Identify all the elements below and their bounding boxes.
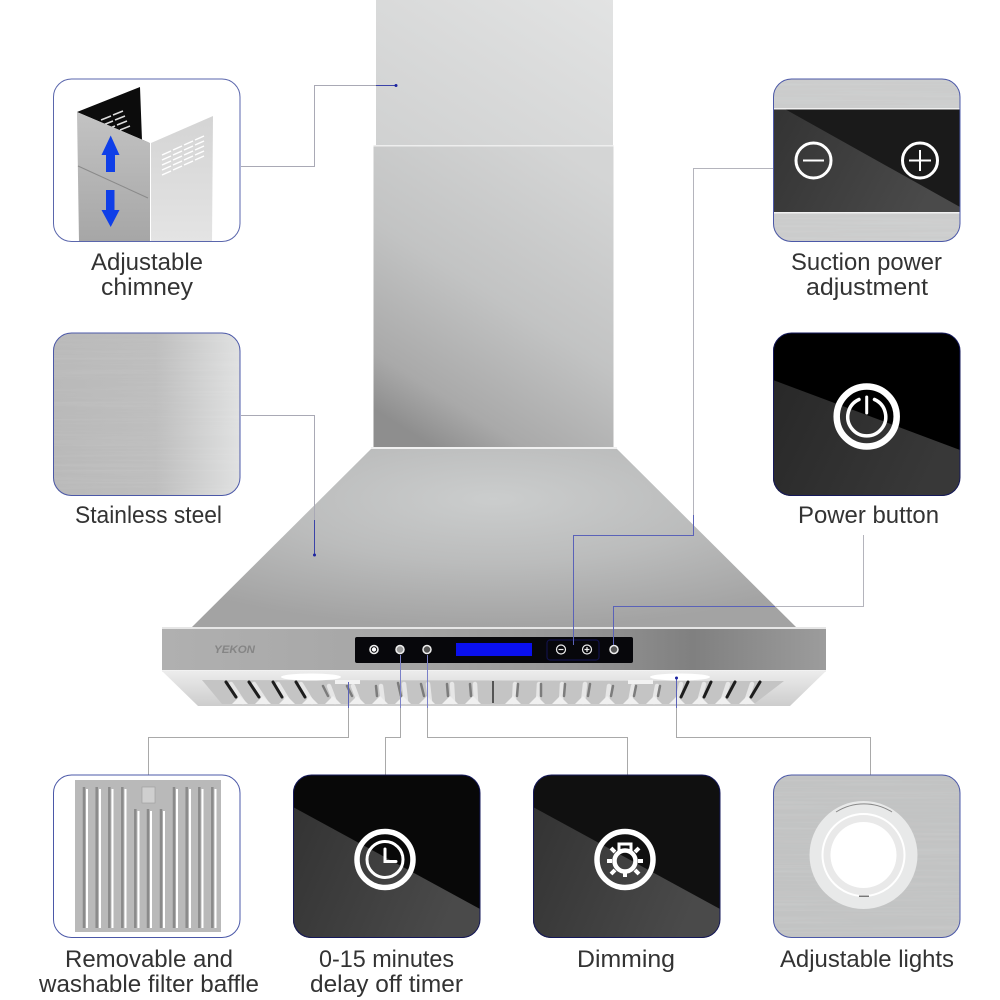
range hood product (162, 0, 826, 706)
front band (162, 627, 826, 672)
leader: dimming (428, 655, 628, 775)
label: dimming: Dimming (577, 946, 675, 973)
chimney back inside (77, 87, 150, 143)
icon: round light (810, 801, 918, 909)
icon: power (837, 386, 897, 446)
lower chimney (374, 145, 614, 447)
icon: minus (796, 143, 831, 178)
right light (650, 674, 710, 680)
label: power button: Power button (798, 502, 939, 529)
label: stainless steel: Stainless steel (75, 502, 222, 529)
leader: filter baffle (148, 682, 348, 775)
louvre feet (232, 696, 755, 704)
panel: delay off timer (293, 775, 480, 938)
label: removable and: Removable and (65, 946, 233, 973)
panel: dimming (533, 775, 720, 938)
upper chimney (376, 0, 613, 146)
button: power left (370, 646, 378, 654)
leader: adjustable lights (675, 676, 870, 775)
hood skirt (191, 447, 797, 628)
centre divider (492, 681, 494, 703)
label: 0-15 minutes: 0-15 minutes (319, 946, 454, 973)
panel: stainless steel (53, 333, 240, 496)
button: power right (610, 646, 618, 654)
label: chimney: chimney (101, 274, 193, 301)
panel: filter baffle (53, 775, 240, 938)
minus plus group (547, 640, 599, 660)
label: washable filter baffle: washable filter baffle (38, 971, 259, 998)
leader: adjustable chimney (241, 84, 398, 166)
label: adjustable lights: Adjustable lights (780, 946, 954, 973)
chimney seam (78, 166, 148, 198)
button: dimming (423, 646, 431, 654)
icon: plus (902, 143, 938, 178)
icon: gear bulb (597, 832, 653, 888)
underside with baffle filters (162, 671, 826, 706)
vents back (100, 110, 130, 130)
baffle plate (75, 780, 221, 932)
leader: timer (386, 655, 400, 775)
icon: clock (357, 832, 413, 888)
leader: power button (614, 535, 864, 645)
vents right (162, 136, 204, 175)
arrow down (102, 190, 120, 227)
label: delay off timer: delay off timer (310, 971, 463, 998)
leader lines (148, 84, 870, 775)
brand logo: YEKON (214, 644, 256, 656)
button: timer (396, 646, 404, 654)
leader: stainless steel (241, 416, 316, 556)
control panel (355, 637, 633, 663)
panel: adjustable lights (773, 775, 960, 938)
leader: suction power (574, 168, 773, 645)
louvres (226, 682, 760, 702)
chimney right face (151, 116, 213, 242)
lcd display (456, 643, 532, 656)
label: suction power: Suction power (791, 249, 942, 276)
filter latches (335, 680, 360, 684)
left light (281, 674, 341, 680)
panel: suction power adjustment (773, 79, 960, 242)
label: adjustment: adjustment (806, 274, 928, 301)
arrow up (102, 136, 120, 172)
chimney left face (77, 112, 150, 242)
panel: adjustable chimney (53, 79, 240, 242)
panel: power button (773, 333, 960, 496)
label: adjustable chimney: Adjustable (91, 249, 203, 276)
